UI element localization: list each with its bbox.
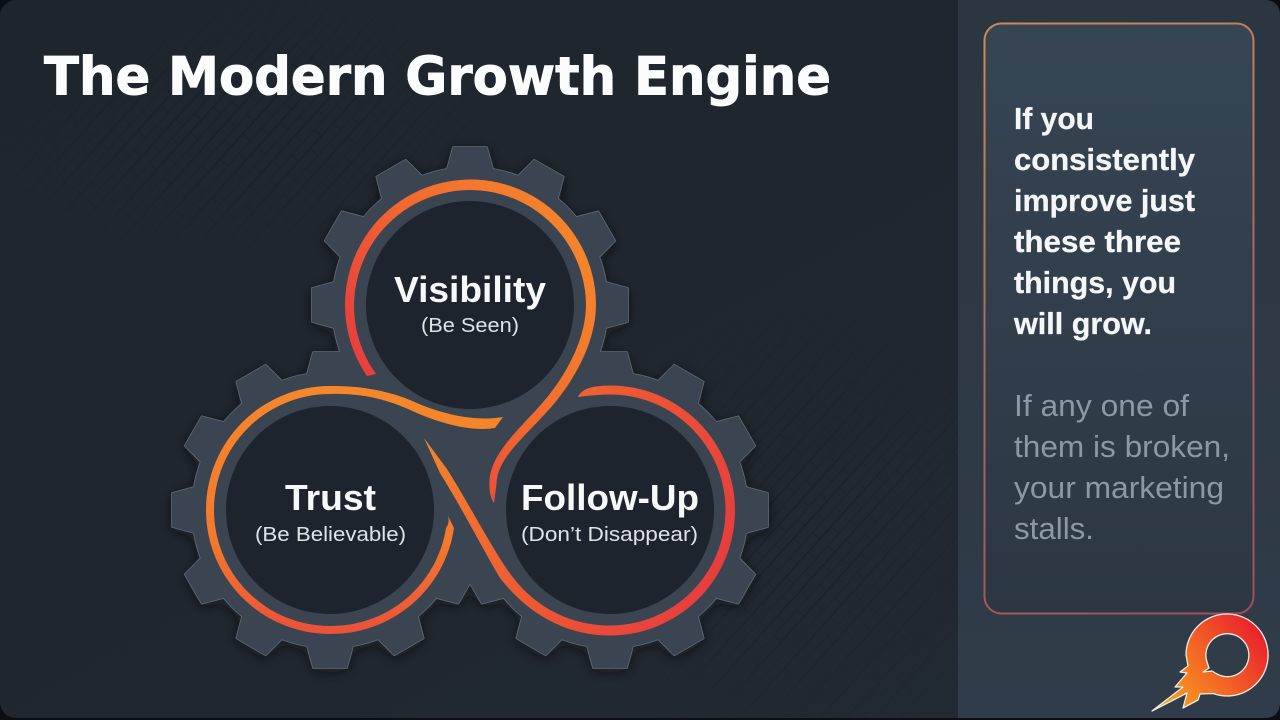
title: The Modern Growth Engine — [44, 46, 831, 108]
diagram: three interlocking gears — [172, 147, 768, 668]
gear hub: trust — [226, 406, 434, 614]
statement: muted: stalls. — [1014, 511, 1094, 546]
ribbon: trust — [206, 386, 503, 634]
statement: muted: If any one of — [1014, 388, 1189, 423]
statement: bold: If you — [1014, 101, 1094, 136]
label: visibility: (Be Seen) — [421, 315, 519, 337]
icon: flaming ring logo — [1152, 614, 1268, 711]
ribbon: visibility — [345, 180, 596, 503]
label: trust: (Be Believable) — [255, 524, 406, 546]
label: trust — [255, 477, 406, 546]
gear hub: visibility — [366, 201, 574, 409]
statement: bold: improve just — [1014, 183, 1195, 218]
statement: bold: things, you — [1014, 265, 1176, 300]
statement: bold — [1013, 101, 1196, 341]
right side panel — [958, 0, 1280, 718]
label: follow-up: (Don’t Disappear) — [521, 524, 698, 546]
slide background — [0, 0, 958, 718]
statement: muted: your marketing — [1014, 470, 1224, 505]
label: follow-up: Follow-Up — [521, 477, 699, 518]
statement: bold: consistently — [1014, 142, 1196, 177]
label: trust: Trust — [285, 477, 376, 518]
label: follow-up — [521, 477, 699, 546]
label: visibility: Visibility — [394, 269, 546, 310]
label: visibility — [394, 269, 546, 337]
statement: muted: them is broken, — [1014, 429, 1230, 464]
ribbon: follow-up — [424, 386, 735, 636]
statement: bold: will grow. — [1013, 306, 1152, 341]
gear hub: follow-up — [506, 406, 714, 614]
gear cluster body — [172, 147, 768, 668]
callout card — [984, 24, 1254, 614]
statement: muted — [1014, 388, 1230, 546]
statement: bold: these three — [1014, 224, 1181, 259]
